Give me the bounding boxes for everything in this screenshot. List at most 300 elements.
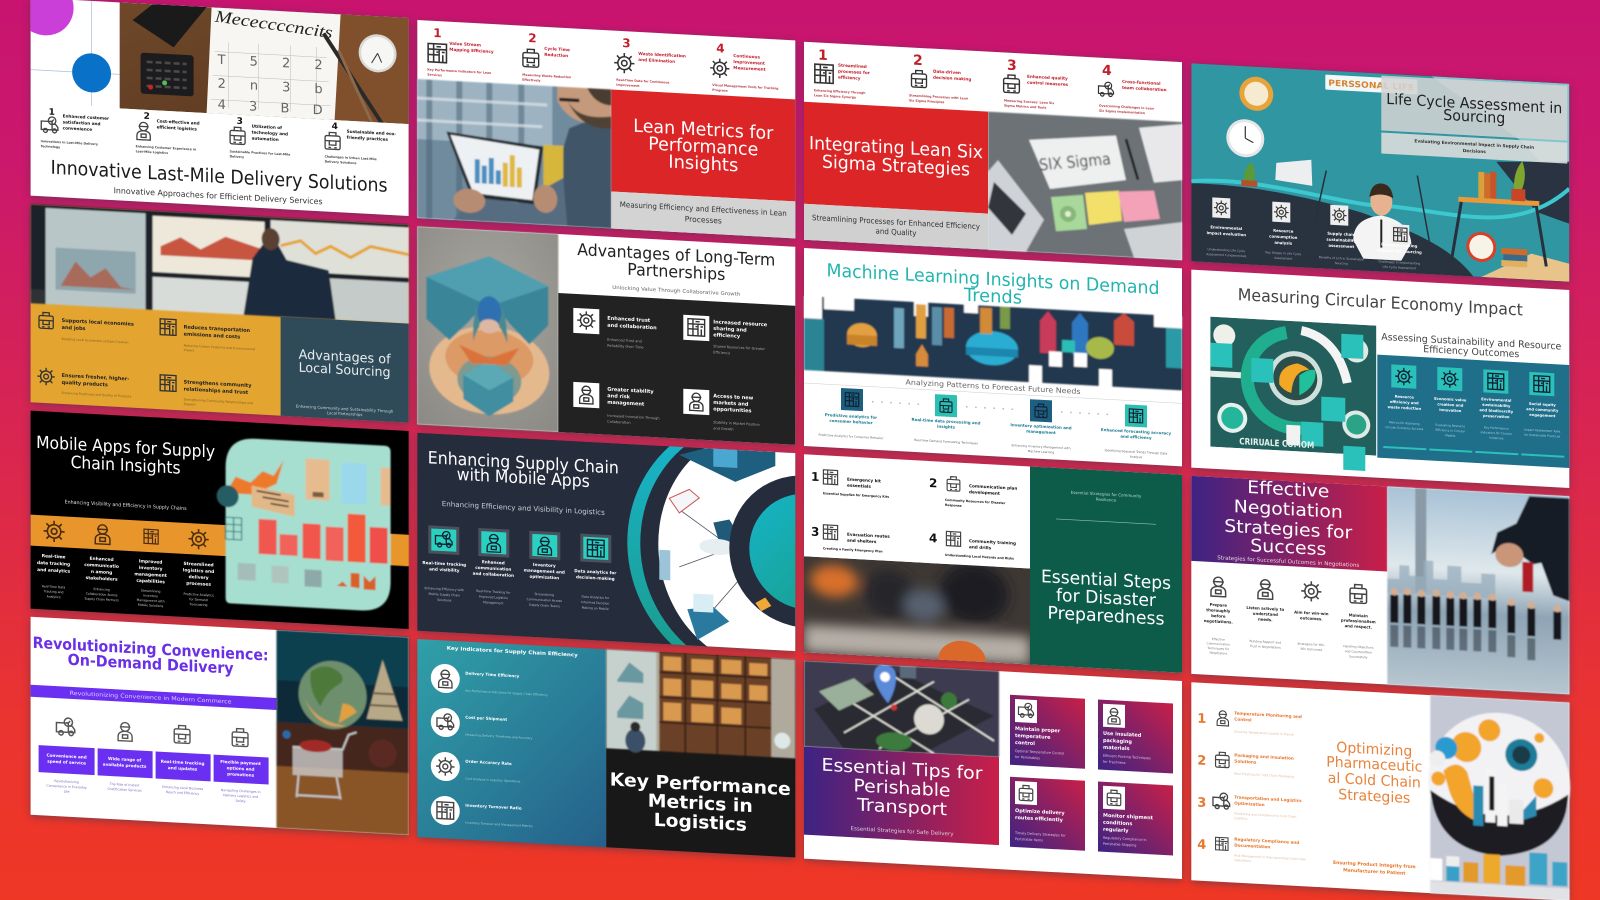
items: Community training <box>969 538 1016 546</box>
slide: Lean Metrics for Performance Insights: Insights <box>668 152 738 176</box>
item row: Technology <box>41 144 60 149</box>
slide: Integrating Lean Six Sigma Strategies <box>804 42 1182 260</box>
tag <box>1325 75 1417 95</box>
item row: Streamlined <box>838 63 867 69</box>
four benefits: management <box>607 400 645 408</box>
photo: engineer with tablet <box>416 78 612 230</box>
heading: Key Indicators for Supply Chain Efficiency <box>447 646 579 659</box>
numbered list: 4 <box>1197 838 1206 853</box>
purple cards: Enhancing Local Business <box>162 785 203 791</box>
numbered list: 1 <box>1197 712 1206 727</box>
four outcomes: Social equity <box>1529 402 1556 407</box>
subtitle: Manufacturer to Patient <box>1343 867 1406 877</box>
items: Communication plan <box>969 483 1017 491</box>
photo: desk with handwritten table: 2 n 3 b <box>218 77 323 97</box>
footer items: Assessment <box>1274 256 1293 261</box>
slide: Enhancing Supply Chain with Mobile Apps: with Mobile Apps <box>457 465 590 492</box>
four strategies: Trust in Negotiations <box>1249 644 1281 650</box>
four strategies: thoroughly <box>1206 607 1231 614</box>
photo: blue cubes sculpture <box>416 226 560 433</box>
item row: Enhancing Customer Experience in <box>136 144 196 152</box>
four outcomes: Models <box>1445 433 1456 438</box>
image: charts and boxes on mint panel <box>217 437 409 613</box>
slide: Lean Metrics for Performance Insights: Processes <box>685 214 722 225</box>
four columns of text: optimization <box>529 574 559 580</box>
four columns of text: decision-making <box>576 574 615 581</box>
four strategies: Effective <box>1212 637 1225 642</box>
item row: Cost-effective and <box>157 118 200 126</box>
footer items: Environmental <box>1210 224 1242 231</box>
four steps: consumer behavior <box>829 418 873 425</box>
four benefits: Enhanced Trust and <box>607 338 642 344</box>
photo: desk with Six Sigma note: SIX Sigma <box>1038 149 1112 174</box>
slide: Key Performance Metrics in Logistics <box>417 639 795 857</box>
slide: Optimizing Pharmaceutical Cold Chain Strategies: Strategies <box>1338 787 1410 807</box>
four benefits: Greater stability <box>607 387 654 395</box>
purple cards: Life <box>64 789 70 794</box>
item row: Enhanced customer <box>63 113 110 121</box>
four strategies: Communication <box>1206 641 1230 647</box>
four columns of text: Streamlined <box>184 561 214 568</box>
photo: globe and shopping cart <box>275 629 410 836</box>
purple cards: Gratification Services <box>108 787 142 793</box>
numbered list: Documentation <box>1234 843 1270 849</box>
four columns of text: data tracking <box>37 560 70 568</box>
four strategies: Aim for win-win <box>1294 609 1329 616</box>
four strategies: Techniques for <box>1206 646 1230 651</box>
item row: and Elimination <box>638 57 675 64</box>
indicator list: Key Performance Indicators for Supply Chain Efficiency <box>465 689 548 697</box>
four steps: Identifying Seasonal Trends Through Data <box>1105 448 1167 456</box>
numbered list: Regulatory Compliance and <box>1234 837 1299 845</box>
four columns of text: Enhancing Efficiency with <box>424 586 464 592</box>
four strategies: Building Rapport and <box>1249 639 1281 645</box>
slide: Essential Steps for Disaster Preparedness: Resilience <box>1096 497 1117 503</box>
footer items: consumption <box>1269 234 1298 240</box>
footer items: Assessment Fundamentals <box>1206 252 1247 258</box>
slide: Essential Steps for Disaster Preparedness: Essential Strategies for Community <box>1071 490 1142 499</box>
purple cards: Flexible payment <box>220 759 261 766</box>
slide: Integrating Lean Six Sigma Strategies: and Quality <box>875 227 917 238</box>
purple band <box>31 685 277 710</box>
four benefits <box>37 312 255 410</box>
numbered list: Best Practices for Cold Chain Packaging <box>1234 772 1294 779</box>
items: 2 <box>929 476 937 490</box>
footer items <box>1206 197 1422 271</box>
item row: efficient logistics <box>157 124 197 132</box>
item row <box>814 47 1167 116</box>
item row: 3 <box>1007 58 1017 74</box>
indicator list: Order Accuracy Rate <box>465 759 512 766</box>
slide: Key Performance Metrics in Logistics: Metrics in <box>648 790 753 817</box>
slide: Advantages of Long-Term Partnerships <box>417 226 795 445</box>
numbered list: Monitoring and Compliance in Cold Chain <box>1234 812 1296 819</box>
photo: desk with handwritten table: 4 3 B D <box>218 98 323 118</box>
purple cards: Convenience and <box>46 753 87 760</box>
item row <box>427 26 779 96</box>
four columns of text: delivery <box>189 574 209 581</box>
four benefits: Strengthening Community Relationships and <box>184 397 253 405</box>
four columns of text: and collaboration <box>473 571 514 578</box>
four columns of text: communication <box>475 565 511 572</box>
items <box>811 469 1017 561</box>
four columns of text: Collaboration Across <box>86 592 118 597</box>
four benefits: markets and <box>713 400 749 408</box>
four strategies: Handling Objections <box>1343 644 1374 650</box>
four tip cards: Regulatory Compliance in <box>1103 836 1147 842</box>
four benefits: Access to new <box>713 393 754 402</box>
slide: Essential Steps for Disaster Preparedness: Preparedness <box>1047 603 1164 630</box>
four steps: and efficiency <box>1120 434 1152 440</box>
icon tiles <box>428 525 611 563</box>
four tip cards <box>1010 695 1173 856</box>
item row: Utilization of <box>252 124 282 130</box>
four columns of text: inventory <box>139 565 163 572</box>
footer items: support for sourcing <box>1377 247 1422 255</box>
footer items: Understanding Life Cycle <box>1208 247 1245 253</box>
four columns of text: Supply Chain Partners <box>85 597 119 602</box>
slide: Life Cycle Assessment in Sourcing: Decisions <box>1463 148 1486 155</box>
item row: Key Performance Indicators for Lean <box>427 68 491 75</box>
items: essentials <box>847 483 871 489</box>
item row: satisfaction and <box>63 119 101 126</box>
four outcomes: waste reduction <box>1388 405 1421 411</box>
four benefits: Ensures fresher, higher- <box>62 373 129 383</box>
four tip cards: Monitor shipment <box>1103 813 1154 821</box>
four columns of text: management <box>134 571 167 579</box>
slide: Revolutionizing Convenience: Revolutionizing Convenience in Modern Commerce <box>70 691 232 706</box>
item row: Overcoming Challenges in Lean <box>1099 104 1154 111</box>
four benefits: Collaboration <box>607 420 631 425</box>
four tip cards: Timely Delivery Strategies for <box>1014 831 1066 838</box>
title panel <box>1381 76 1567 141</box>
slide: Mobile Apps for Supply Chain Insights: Chain Insights <box>71 453 181 479</box>
indicator list: Measuring Delivery Timeliness and Accuracy <box>465 733 533 740</box>
four columns of text: Analytics <box>47 594 61 599</box>
purple cards: Delivery Logistics and <box>223 793 258 799</box>
item row: Measuring Waste Reduction <box>522 73 571 79</box>
four steps: Real-time Demand Forecasting Techniques <box>914 438 978 445</box>
footer items: analysis <box>1274 240 1293 246</box>
four columns of text: Predictive Analytics <box>183 592 214 598</box>
four strategies: understand <box>1253 611 1278 617</box>
photo: gears and pill stacks <box>1428 694 1572 900</box>
items: Creating a Family Emergency Plan <box>823 546 883 554</box>
four steps: Enhancing Inventory Management with <box>1011 443 1071 450</box>
four strategies: Negotiators <box>1210 651 1227 656</box>
four tip cards: regularly <box>1103 827 1129 834</box>
item row: Value Stream <box>449 41 482 47</box>
slide: Essential Steps for Disaster Preparedness <box>804 454 1182 693</box>
item row: Sustainable Practices for Last-Mile <box>230 149 290 157</box>
four benefits: Reduces transportation <box>184 324 251 334</box>
four outcomes: Metrics for Assessing <box>1389 420 1420 426</box>
four steps: Inventory optimization and <box>1010 422 1072 430</box>
four tip cards: temperature <box>1015 733 1051 741</box>
title: Key Performance <box>610 769 791 800</box>
item row: 1 <box>433 26 442 40</box>
four columns of text: Real-time tracking <box>422 560 466 567</box>
numbered list: 2 <box>1197 754 1206 769</box>
title: Revolutionizing Convenience: <box>33 634 269 665</box>
four benefits: Support <box>184 402 197 407</box>
slide: Life Cycle Assessment in Sourcing: Life Cycle Assessment in <box>1386 90 1562 117</box>
numbered list: Ensuring Temperature Control in Transit <box>1234 730 1295 737</box>
slide: Lean Metrics for Performance Insights: Measuring Efficiency and Effectiveness in Lean <box>620 200 787 218</box>
indicator list: Delivery Time Efficiency <box>465 671 520 679</box>
four outcomes: Key Performance <box>1484 425 1509 431</box>
photo: desk with handwritten table: Mececcccncits <box>213 7 334 42</box>
footer items: sustainability <box>1326 237 1357 243</box>
right navy and floor <box>1496 158 1569 224</box>
item row: Cycle Time <box>544 46 570 52</box>
numbered list: Transportation and Logistics <box>1234 795 1302 803</box>
numbered list: Operations <box>1234 858 1251 863</box>
slide: Effective Negotiation Strategies for Success: Strategies for Successful Outcomes in Negotiations <box>1217 555 1359 569</box>
four columns of text: Streamlining <box>534 592 554 597</box>
footer items: Resource <box>1273 228 1294 234</box>
items: and shelters <box>847 538 877 544</box>
four tip cards: conditions <box>1103 820 1132 827</box>
four columns of text: Management with <box>137 598 165 603</box>
four steps: management <box>1026 429 1056 435</box>
four strategies: before <box>1211 613 1226 619</box>
four outcomes: sustainability <box>1482 403 1511 408</box>
four tip cards: Optimal Temperature Control <box>1015 749 1064 756</box>
orange band <box>31 515 409 566</box>
four outcomes: Evaluating Resource <box>1436 423 1465 428</box>
four columns of text: processes <box>186 581 211 588</box>
slide: Effective Negotiation Strategies for Success <box>1191 475 1569 694</box>
purple cards: available products <box>103 762 147 769</box>
item row: Continuous <box>733 53 760 60</box>
slide: Local Sourcing <box>31 204 409 423</box>
title panel <box>804 747 999 845</box>
four tip cards: Efficient Packing Techniques <box>1103 754 1151 760</box>
slide: Lean Metrics for Performance Insights <box>417 20 795 238</box>
footer items: Key Stages in Life Cycle <box>1265 250 1301 256</box>
four benefits: Efficiency <box>713 350 730 355</box>
four columns of text: communicatio <box>84 562 119 570</box>
numbered list <box>1197 709 1306 866</box>
item row: 4 <box>716 41 725 56</box>
teal ring and white circle <box>627 407 897 692</box>
four columns of text: capabilities <box>136 578 165 585</box>
four columns of text: Tracking and <box>43 589 63 594</box>
four tip cards: for Perishables <box>1015 755 1040 760</box>
dark panel <box>558 293 795 445</box>
slide: Innovative Last-Mile Delivery Solutions <box>16 0 409 216</box>
photo: warehouse shelves <box>605 648 796 760</box>
items: 4 <box>929 531 937 545</box>
four outcomes: Indicators for Circular <box>1481 430 1513 436</box>
four benefits: and Growth <box>713 426 734 431</box>
slide: Essential Tips for Perishable Transport: Essential Tips for <box>822 756 983 784</box>
item row: friendly practices <box>347 135 388 142</box>
slide: Optimizing Pharmaceutical Cold Chain Strategies: Pharmaceutic <box>1326 754 1422 776</box>
four strategies: and Counteroffers <box>1345 649 1372 655</box>
four benefits: Boosting Local Economies and Job Creation <box>62 337 129 344</box>
item row: Delivery <box>230 154 244 159</box>
indicator list <box>431 663 548 831</box>
four columns of text: Mobile Solutions <box>138 603 164 608</box>
red title panel <box>611 89 795 201</box>
four outcomes: engagement <box>1529 413 1556 418</box>
four steps: Analysis <box>1130 455 1143 459</box>
item row: Sigma Metrics and Tools <box>1004 104 1046 110</box>
item row: Enhanced quality <box>1027 74 1068 81</box>
slide: Optimizing Pharmaceutical Cold Chain Strategies <box>1191 682 1570 900</box>
footer items: Sourcing <box>1335 261 1348 266</box>
items: 1 <box>811 470 819 484</box>
item row: 3 <box>237 117 243 127</box>
four strategies: Listen actively to <box>1246 605 1285 612</box>
subtitle: Ensuring Product Integrity from <box>1333 860 1416 870</box>
item row: Cross-functional <box>1122 79 1161 86</box>
four columns of text: Improved Logistics <box>479 595 508 600</box>
four outcomes <box>1383 364 1564 457</box>
title: Optimizing <box>1336 740 1412 760</box>
purple cards: and updates <box>168 765 198 772</box>
indicator list: Cost Analysis in Logistics Operations <box>465 777 521 784</box>
navy footer <box>1191 183 1473 277</box>
slide: Effective Negotiation Strategies for Success: Negotiation <box>1234 497 1343 523</box>
footer items: Decision-making <box>1381 242 1418 249</box>
grey subtitle panel <box>611 191 795 238</box>
slide: Essential Tips for Perishable Transport: Essential Strategies for Safe Delivery <box>851 826 954 838</box>
four benefits: Increased Innovation Through <box>607 414 660 420</box>
photo: analyst at dashboards <box>30 203 410 324</box>
item row: automation <box>252 136 279 142</box>
gradient header <box>1191 476 1387 571</box>
item row: 1 <box>49 108 55 118</box>
title: Mobile Apps for Supply <box>36 433 215 463</box>
purple cards <box>39 745 269 805</box>
slide: Local Sourcing: Local Sourcing <box>299 361 391 381</box>
four outcomes: Efficiency in Circular <box>1436 428 1466 433</box>
slide: Local Sourcing: Local Partnerships <box>327 410 362 417</box>
four columns of text: Streamlining <box>141 589 160 594</box>
slide: Measuring Circular Economy Impact <box>1191 270 1569 488</box>
four outcomes: efficiency and <box>1390 400 1419 405</box>
slide: Life Cycle Assessment in Sourcing <box>1191 63 1569 282</box>
four columns of text: Mobile Supply Chain <box>429 592 460 598</box>
four benefits: Reducing Carbon Footprint and Environmental <box>184 343 255 351</box>
green title panel <box>1030 467 1182 673</box>
four columns of text: Supply Chain Teams <box>529 603 560 608</box>
four benefits: and collaboration <box>607 323 657 331</box>
four outcomes: Initiatives <box>1489 436 1504 440</box>
item row: efficiency <box>838 75 861 81</box>
slide: Life Cycle Assessment in Sourcing: Sourcing <box>1443 106 1505 127</box>
footer items: Life Cycle Assessment <box>1383 265 1417 270</box>
purple cards: Real-time tracking <box>161 759 204 766</box>
subtitle: Unlocking Value Through Collaborative Growth <box>612 285 740 298</box>
subtitle: Analyzing Patterns to Forecast Future Needs <box>906 377 1081 396</box>
four columns of text: Enhanced <box>90 556 114 563</box>
items: 3 <box>811 525 819 539</box>
four columns of text: n among <box>91 570 112 576</box>
four columns of text: Informed Decision <box>581 600 609 606</box>
slide: Lean Metrics for Performance Insights: Lean Metrics for <box>633 116 774 144</box>
slide: Mobile Apps for Supply Chain Insights <box>31 411 409 629</box>
four columns of text: Forecasting <box>190 602 208 607</box>
items: Understanding Local Hazards and Risks <box>945 553 1014 561</box>
four columns of text: management and <box>524 567 565 575</box>
slide: Life Cycle Assessment in Sourcing: Evaluating Environmental Impact in Supply Chain <box>1414 138 1534 151</box>
four steps: Predictive Analytics for Consumer Behavior <box>819 433 884 440</box>
four strategies: outcomes. <box>1300 615 1323 622</box>
four tip cards: materials <box>1103 745 1130 752</box>
four outcomes: and biodiversity <box>1479 408 1514 414</box>
title: Innovative Last-Mile Delivery Solutions <box>51 157 388 197</box>
item row: 2 <box>913 53 923 69</box>
four outcomes: preservation <box>1483 414 1510 419</box>
slide: Essential Tips for Perishable Transport <box>804 661 1182 879</box>
slide: Essential Tips for Perishable Transport: Perishable <box>854 776 950 802</box>
four outcomes: creation and <box>1437 402 1464 408</box>
purple cards: Revolutionizing <box>54 779 79 784</box>
item row: Innovations in Last-Mile Delivery <box>41 139 98 146</box>
four columns of text: for Demand <box>189 597 208 602</box>
slide: Measuring Circular Economy Impact: Efficiency Outcomes <box>1423 344 1519 360</box>
four benefits: Increased resource <box>713 319 768 328</box>
four columns of text: Solutions <box>437 598 452 603</box>
item row: Progress <box>712 88 728 93</box>
items: Response <box>945 503 962 508</box>
item row: Six Sigma Implementation <box>1099 109 1145 115</box>
item row: Enhancing Efficiency Through <box>814 88 865 95</box>
numbered list: Risk Management in Pharmaceutical Cold Chain <box>1234 854 1306 861</box>
four steps: insights <box>937 424 956 430</box>
four columns of text <box>37 553 214 611</box>
four outcomes: Resource <box>1395 395 1414 400</box>
numbered list: Packaging and Insulation <box>1234 753 1294 761</box>
title panel <box>281 317 409 423</box>
four outcomes: Circular Economy Success <box>1385 425 1424 431</box>
purple cards: Wide range of <box>108 756 141 763</box>
item row <box>41 106 396 167</box>
slide: Advantages of Long-Term Partnerships: Partnerships <box>627 260 725 284</box>
slide: Integrating Lean Six Sigma Strategies: Integrating Lean Six <box>809 133 983 163</box>
item row: Waste Identification <box>638 51 686 59</box>
four benefits: Supports local economies <box>62 318 134 328</box>
four benefits: relationships and trust <box>184 386 249 396</box>
slide: Integrating Lean Six Sigma Strategies: Sigma Strategies <box>822 152 970 181</box>
four strategies: Maintain <box>1349 612 1368 618</box>
numbered list: Solutions <box>1234 759 1257 765</box>
four benefits: and risk <box>607 393 631 400</box>
indicator list: Inventory Turnover and Management Metrics <box>465 821 533 828</box>
four columns of text: Real-Time Data <box>42 584 65 589</box>
item row: Real-Time Data for Continuous <box>616 78 670 85</box>
subtitle: Enhancing Visibility and Efficiency in Supply Chains <box>65 499 187 512</box>
four benefits: quality products <box>62 380 108 388</box>
slide: Effective Negotiation Strategies for Success: Effective <box>1247 478 1329 502</box>
four columns of text: Improved <box>139 558 162 566</box>
slide: Local Sourcing: Enhancing Community and Sustainability Through <box>296 404 394 414</box>
items: Community Resources for Disaster <box>945 498 1006 505</box>
item row: Reduction <box>544 52 568 58</box>
four outcomes: Economic value <box>1434 397 1467 402</box>
four benefits: Strengthens community <box>184 379 252 389</box>
four benefits: Reliability Over Time <box>607 344 644 350</box>
four columns of text: Enhancing <box>93 587 110 592</box>
four tip cards: Optimize delivery <box>1015 808 1065 817</box>
four columns of text: Enhanced <box>482 559 505 565</box>
item row: Last-Mile Logistics <box>136 149 168 155</box>
four columns of text: Communication Across <box>527 597 562 603</box>
